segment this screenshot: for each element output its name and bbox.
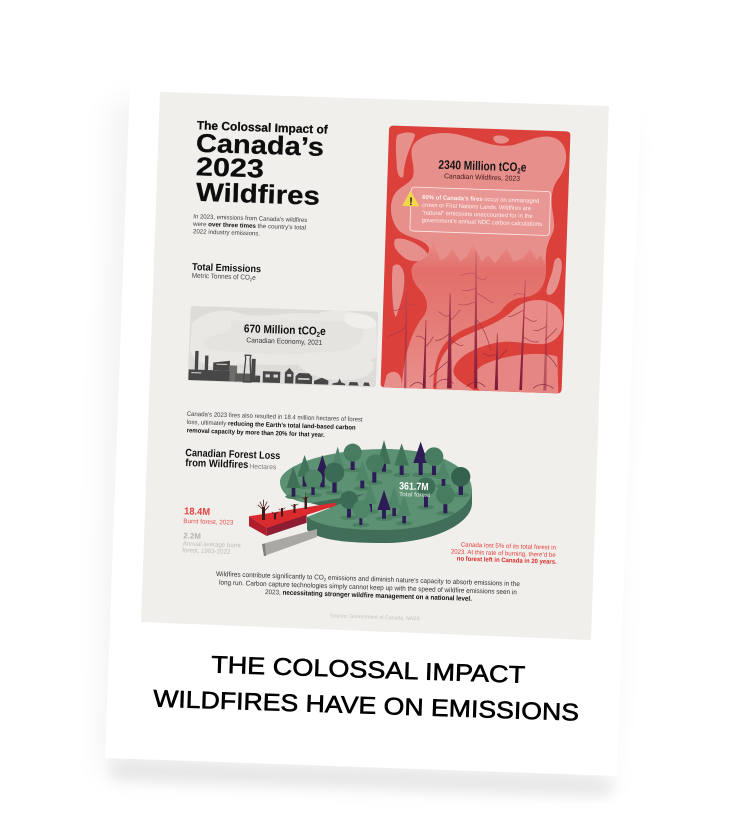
- panel: canadian wildfires emissions: 2340 Million tCO: [438, 158, 536, 175]
- notch shadow: [310, 493, 368, 508]
- total forest label: Total forest: [399, 492, 430, 499]
- forest loss heading: [185, 447, 281, 471]
- callout: [402, 187, 551, 236]
- forest paragraph: Canada’s 2023 fires also resulted in 18.4 million hectares of forest: [187, 411, 363, 424]
- callout: 60% of Canada’s fires occur on unmanaged: [422, 195, 539, 205]
- panel: canadian economy emissions: Canadian Economy, 2021: [246, 337, 323, 347]
- burnt forest legend: [182, 506, 241, 556]
- intro text: [192, 213, 307, 238]
- forest paragraph: removal capacity by more than 20% for that year.: [187, 427, 325, 439]
- forest loss heading: from Wildfires: [185, 457, 249, 471]
- icon: city skyline: [188, 351, 371, 386]
- conclusion text: Wildfires contribute significantly to CO: [216, 571, 331, 582]
- total emissions heading: e: [252, 275, 256, 282]
- title: Wildfires: [196, 177, 320, 211]
- panel: canadian wildfires emissions: Canadian Wildfires, 2023: [444, 173, 520, 183]
- total emissions heading: Metric Tonnes of CO: [192, 273, 256, 282]
- panel: canadian economy emissions: 2: [316, 332, 320, 339]
- gray wedge: average burnt forest: [262, 529, 317, 556]
- panel: canadian economy emissions: [188, 306, 378, 387]
- intro text: In 2023, emissions from Canada’s wildfires: [193, 213, 307, 224]
- intro text: were over three times the country’s total: [192, 221, 306, 232]
- burnt forest legend: forest, 1983-2022: [182, 547, 231, 556]
- card shadow: [100, 100, 630, 796]
- chart: forest pie: [249, 440, 472, 556]
- panel: canadian economy emissions: 670 Million tCO: [244, 323, 327, 338]
- conclusion text: 2: [324, 577, 327, 582]
- red note: no forest left in Canada in 20 years.: [457, 556, 557, 566]
- icon: warning triangle: [402, 190, 420, 208]
- caption: [153, 652, 579, 727]
- conclusion text: emissions and diminish nature’s capacity to absorb emissions in the: [326, 575, 520, 588]
- title: 2023: [196, 151, 264, 184]
- callout: government’s annual NDC carbon calculations.: [422, 218, 544, 228]
- total emissions heading: [192, 262, 262, 282]
- red note: Canada lost 5% of its total forest in: [461, 542, 557, 552]
- burnt forest legend: 18.4M: [184, 506, 210, 518]
- conclusion text: [216, 571, 520, 603]
- title: The Colossal Impact of: [197, 118, 329, 137]
- total forest label: 361.7M: [399, 480, 429, 493]
- red wedge: burnt forest 2023: [249, 503, 336, 536]
- source: Source: Government of Canada, NASA: [330, 613, 420, 622]
- white card: [105, 55, 642, 776]
- total forest label: [399, 480, 430, 499]
- title: [196, 118, 329, 211]
- icon: dead trees: [388, 252, 557, 391]
- forest loss heading: Canadian Forest Loss: [185, 447, 281, 462]
- title: Canada’s: [196, 128, 324, 162]
- intro text: 2022 industry emissions.: [193, 228, 260, 238]
- burnt forest legend: 2.2M: [183, 531, 201, 541]
- conclusion text: 2023, necessitating stronger wildfire management on a national level.: [265, 589, 472, 603]
- red note: 2023. At this rate of burning, there’d be: [451, 549, 556, 559]
- pie top: [280, 449, 472, 530]
- pie side: [307, 490, 472, 543]
- panel: canadian wildfires emissions: [381, 126, 570, 393]
- forest paragraph: [187, 411, 363, 439]
- burnt forest legend: Annual average burnt: [183, 541, 241, 549]
- panel: canadian economy emissions: e: [320, 326, 326, 338]
- panel: canadian wildfires emissions: 2: [517, 166, 521, 175]
- forest paragraph: loss, ultimately reducing the Earth’s total land-based carbon: [187, 419, 356, 432]
- icon: warning triangle: !: [409, 196, 413, 208]
- callout: “natural” emissions unaccounted for in the: [422, 210, 534, 220]
- caption: THE COLOSSAL IMPACT: [211, 652, 526, 689]
- callout: crown or First Nations Lands. Wildfires are: [422, 203, 532, 212]
- total emissions heading: Total Emissions: [192, 262, 262, 275]
- caption: WILDFIRES HAVE ON EMISSIONS: [153, 686, 579, 727]
- icon: burnt trees: [258, 493, 309, 520]
- trees: [285, 440, 470, 527]
- burnt forest legend: Burnt forest, 2023: [183, 518, 234, 527]
- forest loss heading: Hectares: [249, 464, 277, 471]
- red note: [451, 542, 557, 566]
- conclusion text: long run. Carbon capture technologies simply cannot keep up with the speed of wildfire emissions seen in: [219, 580, 517, 596]
- infographic panel: [141, 92, 609, 640]
- total emissions heading: 2: [250, 277, 253, 282]
- panel: canadian wildfires emissions: e: [521, 160, 527, 175]
